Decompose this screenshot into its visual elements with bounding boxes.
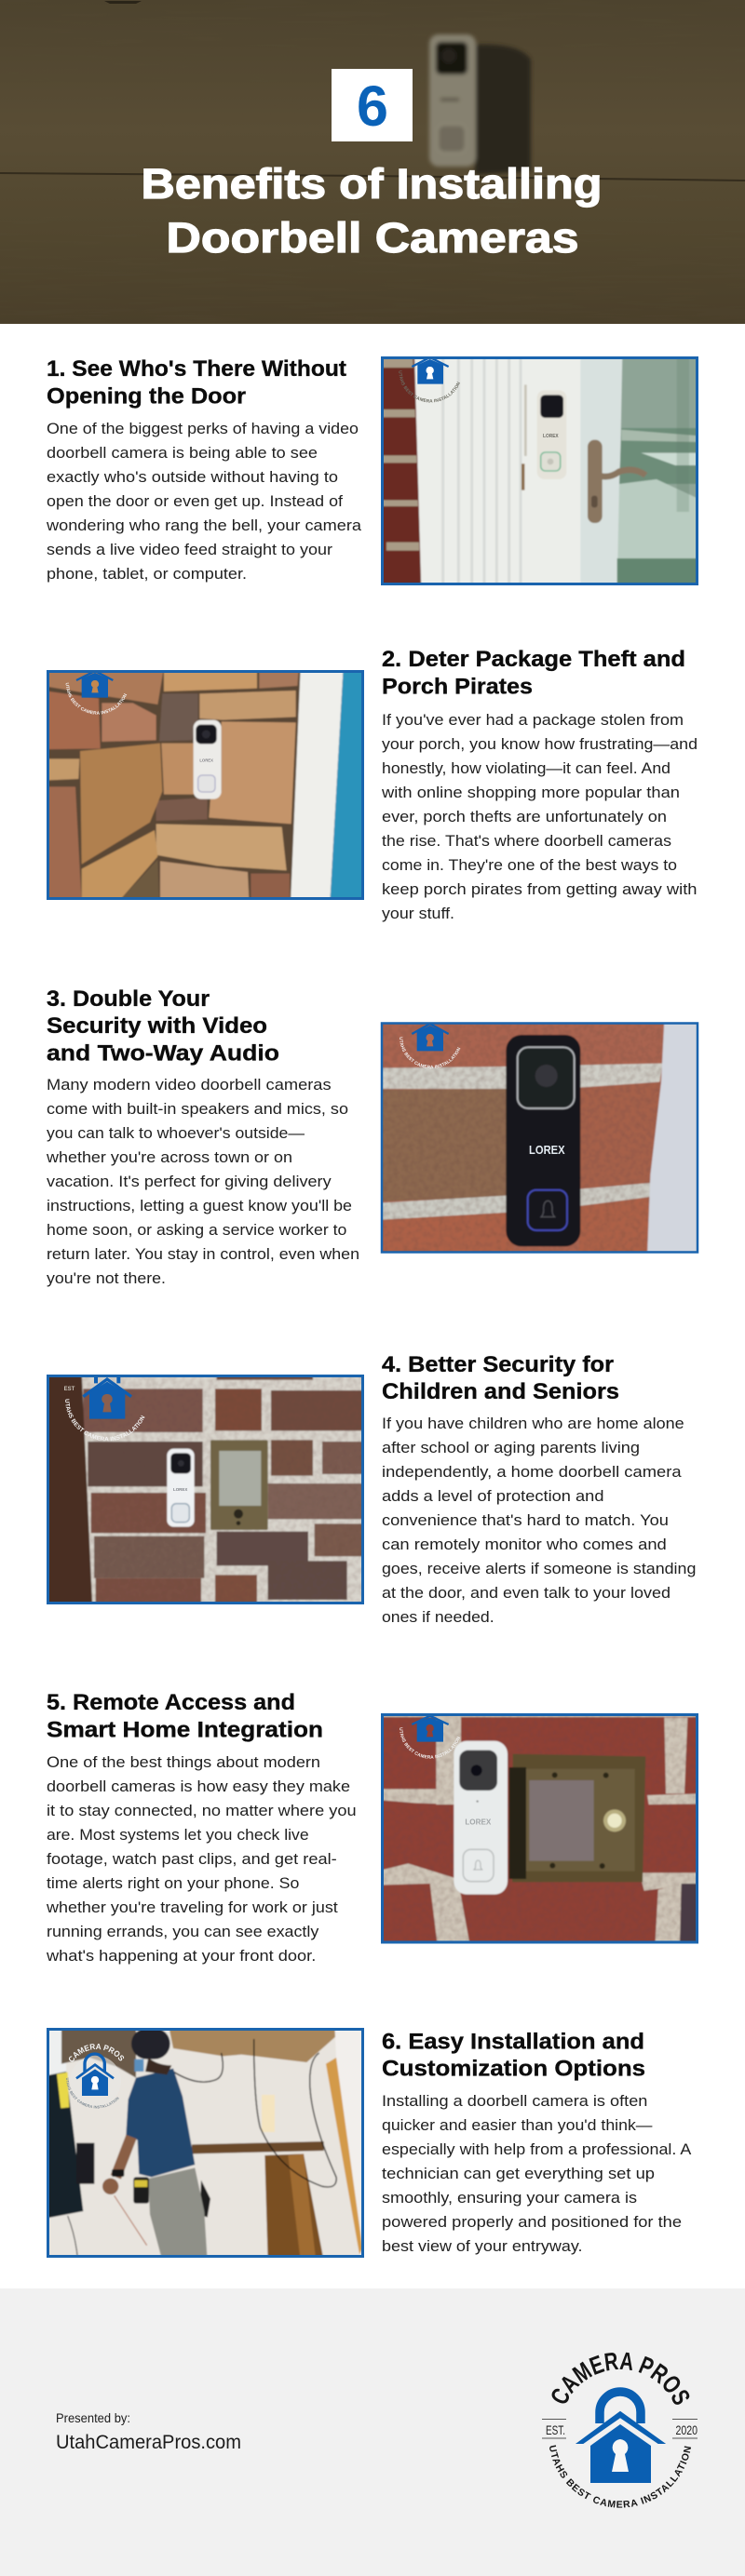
section 1 body text: phone, tablet, or computer. (47, 565, 247, 583)
icon: watermark logo: UTAHS BEST CAMERA INSTALLATION (400, 1037, 460, 1068)
section 5 body text: running errands, you can see exactly (47, 1923, 319, 1940)
number badge (332, 69, 413, 141)
icon: watermark logo with Camera Pros wordmark: CAMERA PROS (69, 2044, 125, 2062)
logo: Camera Pros (542, 2353, 698, 2508)
logo: Camera Pros: 2020 (676, 2422, 698, 2437)
section 3 body text: you're not there. (47, 1269, 166, 1287)
photo frame (48, 2029, 363, 2256)
section 2 body text: If you've ever had a package stolen from (382, 711, 684, 729)
icon: watermark logo: UTAHS BEST CAMERA INSTALLATION (399, 370, 460, 402)
section 3 body text: whether you're across town or on (46, 1148, 292, 1166)
section 1 body text (46, 420, 362, 583)
logo: Camera Pros: EST. (546, 2422, 565, 2437)
section 4 body text: can remotely monitor who comes and (382, 1536, 667, 1553)
section 6 body text (382, 2092, 692, 2255)
section 5 body text: are. Most systems let you check live (47, 1826, 309, 1844)
section 2 body text: with online shopping more popular than (381, 784, 680, 801)
section 5 body text: what's happening at your front door. (46, 1947, 316, 1965)
section 5 body text: One of the best things about modern (47, 1753, 320, 1771)
section 3 body text: vacation. It's perfect for giving delivery (47, 1173, 332, 1190)
icon: watermark logo (64, 1377, 145, 1441)
section 2 heading: 2. Deter Package Theft and (382, 647, 685, 672)
photo 4: doorbell and plate on painted brick (49, 1377, 361, 1602)
photo 3: black doorbell on brick (383, 1024, 697, 1251)
icon: watermark logo: UTAHS BEST CAMERA INSTALLATION (400, 1727, 460, 1759)
section 6 body text: Installing a doorbell camera is often (382, 2092, 647, 2110)
icon: watermark logo (400, 1716, 460, 1759)
section 4 body text: goes, receive alerts if someone is standing (382, 1560, 696, 1577)
presented by text: Presented by: (56, 2410, 130, 2425)
section 5 body text: doorbell cameras is how easy they make (47, 1778, 350, 1795)
photo 5: white doorbell beside brass plate on red brick (384, 1716, 696, 1941)
photo 1: white doorbell on door frame: LOREX (543, 434, 559, 439)
section 3 heading (47, 986, 279, 1067)
section 5 heading: Smart Home Integration (47, 1718, 323, 1742)
section 4 body text: after school or aging parents living (382, 1439, 640, 1456)
section 2 heading: Porch Pirates (382, 674, 533, 700)
section 4 body text: If you have children who are home alone (382, 1415, 684, 1432)
presented by text (56, 2410, 241, 2453)
title (142, 160, 602, 262)
section 5 heading: 5. Remote Access and (47, 1690, 295, 1715)
section 2 body text: the rise. That's where doorbell cameras (382, 832, 671, 850)
section 2 body text: honestly, how violating—it can feel. And (382, 759, 670, 777)
icon: watermark logo (400, 1024, 460, 1068)
photo 2: doorbell on stacked stone: LOREX (199, 758, 214, 763)
photo frame (48, 672, 363, 899)
icon: watermark logo with Camera Pros wordmark (66, 2044, 125, 2109)
panel: header banner (0, 0, 745, 324)
section 4 heading (382, 1352, 619, 1404)
icon: house with keyhole (590, 2424, 651, 2483)
photo frame (48, 1375, 363, 1603)
section 6 heading: Customization Options (382, 2057, 645, 2081)
section 3 body text: home soon, or asking a service worker to (47, 1221, 346, 1239)
section 3 heading: Security with Video (47, 1013, 267, 1039)
section 2 body text: your stuff. (382, 905, 454, 922)
section 2 body text: come in. They're one of the best ways to (382, 856, 677, 874)
section 4 body text (382, 1415, 696, 1626)
photo 2: doorbell on stacked stone (49, 673, 361, 897)
section 4 body text: adds a level of protection and (382, 1487, 603, 1505)
icon: watermark logo with Camera Pros wordmark: UTAHS BEST CAMERA INSTALLATION (66, 2077, 119, 2109)
section 5 body text: time alerts right on your phone. So (47, 1874, 299, 1892)
section 6 body text: powered properly and positioned for the (382, 2213, 682, 2231)
section 3 heading: 3. Double Your (47, 986, 210, 1012)
section 3 body text (46, 1076, 359, 1287)
section 6 body text: smoothly, ensuring your camera is (382, 2189, 637, 2207)
section 3 heading: and Two-Way Audio (47, 1040, 279, 1067)
title: Benefits of Installing (142, 160, 602, 208)
logo: Camera Pros: UTAHS BEST CAMERA INSTALLATION (549, 2445, 691, 2508)
panel: footer (0, 2288, 745, 2576)
section 6 body text: especially with help from a professional. A (382, 2140, 692, 2158)
section 3 body text: Many modern video doorbell cameras (47, 1076, 332, 1093)
section 4 body text: at the door, and even talk to your loved (382, 1584, 670, 1602)
section 5 body text (46, 1753, 357, 1965)
section 1 body text: sends a live video feed straight to your (47, 541, 332, 558)
section 1 body text: One of the biggest perks of having a video (47, 420, 359, 437)
section 1 body text: exactly who's outside without having to (47, 468, 338, 486)
section 6 heading: 6. Easy Installation and (382, 2029, 644, 2055)
section 3 body text: come with built-in speakers and mics, so (47, 1100, 348, 1118)
photo 4: doorbell and plate on painted brick: LOREX (173, 1487, 188, 1492)
photo frame (382, 1714, 697, 1942)
section 2 body text: keep porch pirates from getting away with (382, 880, 697, 898)
title: Doorbell Cameras (166, 214, 579, 262)
siding seam (0, 173, 745, 181)
photo frame (382, 357, 697, 584)
section 3 body text: instructions, letting a guest know you'll be (47, 1197, 352, 1214)
section 1 heading: Opening the Door (47, 383, 246, 409)
section 4 body text: convenience that's hard to match. You (382, 1511, 669, 1529)
photo 5: white doorbell beside brass plate on red brick: LOREX (465, 1817, 492, 1826)
section 3 body text: return later. You stay in control, even when (47, 1245, 359, 1263)
section 4 body text: ones if needed. (382, 1608, 494, 1626)
icon: watermark logo: UTAHS BEST CAMERA INSTALLATION (65, 683, 127, 715)
section 5 body text: whether you're traveling for work or just (46, 1898, 338, 1916)
section 6 heading (382, 2029, 645, 2081)
section 6 body text: best view of your entryway. (382, 2237, 583, 2255)
icon: watermark logo (399, 359, 460, 402)
icon: roof chevron (578, 2412, 663, 2443)
section 5 heading (47, 1690, 323, 1742)
icon: watermark logo: EST (64, 1387, 75, 1392)
section 1 body text: open the door or even get up. Instead of (47, 492, 343, 510)
section 1 body text: wondering who rang the bell, your camera (46, 517, 362, 534)
section 1 heading: 1. See Who's There Without (47, 356, 346, 382)
section 4 heading: Children and Seniors (382, 1379, 619, 1404)
section 3 body text: you can talk to whoever's outside— (47, 1124, 305, 1142)
section 1 heading (47, 356, 346, 409)
section 2 body text: ever, porch thefts are unfortunately on (382, 808, 667, 825)
logo: Camera Pros: CAMERA PROS (551, 2353, 689, 2405)
icon: padlock shackle (600, 2392, 641, 2423)
number badge: 6 (357, 74, 388, 138)
section 2 heading (382, 647, 685, 700)
icon: watermark logo: UTAHS BEST CAMERA INSTALLATION (65, 1399, 145, 1441)
presented by text: UtahCameraPros.com (56, 2431, 241, 2453)
section 1 body text: doorbell camera is being able to see (47, 444, 318, 462)
section 5 body text: it to stay connected, no matter where you (47, 1802, 357, 1819)
section 4 body text: independently, a home doorbell camera (382, 1463, 682, 1481)
photo 1: white doorbell on door frame (384, 359, 696, 583)
section 6 body text: quicker and easier than you'd think— (382, 2116, 652, 2134)
photo 6: technician installing wiring (49, 2031, 361, 2255)
icon: doorbell in header photo (429, 34, 531, 175)
photo 3: black doorbell on brick: LOREX (529, 1144, 565, 1157)
section 6 body text: technician can get everything set up (382, 2165, 655, 2182)
photo frame (382, 1024, 698, 1253)
section 2 body text (381, 711, 698, 922)
section 4 heading: 4. Better Security for (382, 1352, 614, 1377)
section 2 body text: your porch, you know how frustrating—and (382, 735, 698, 753)
section 5 body text: footage, watch past clips, and get real- (47, 1850, 337, 1868)
